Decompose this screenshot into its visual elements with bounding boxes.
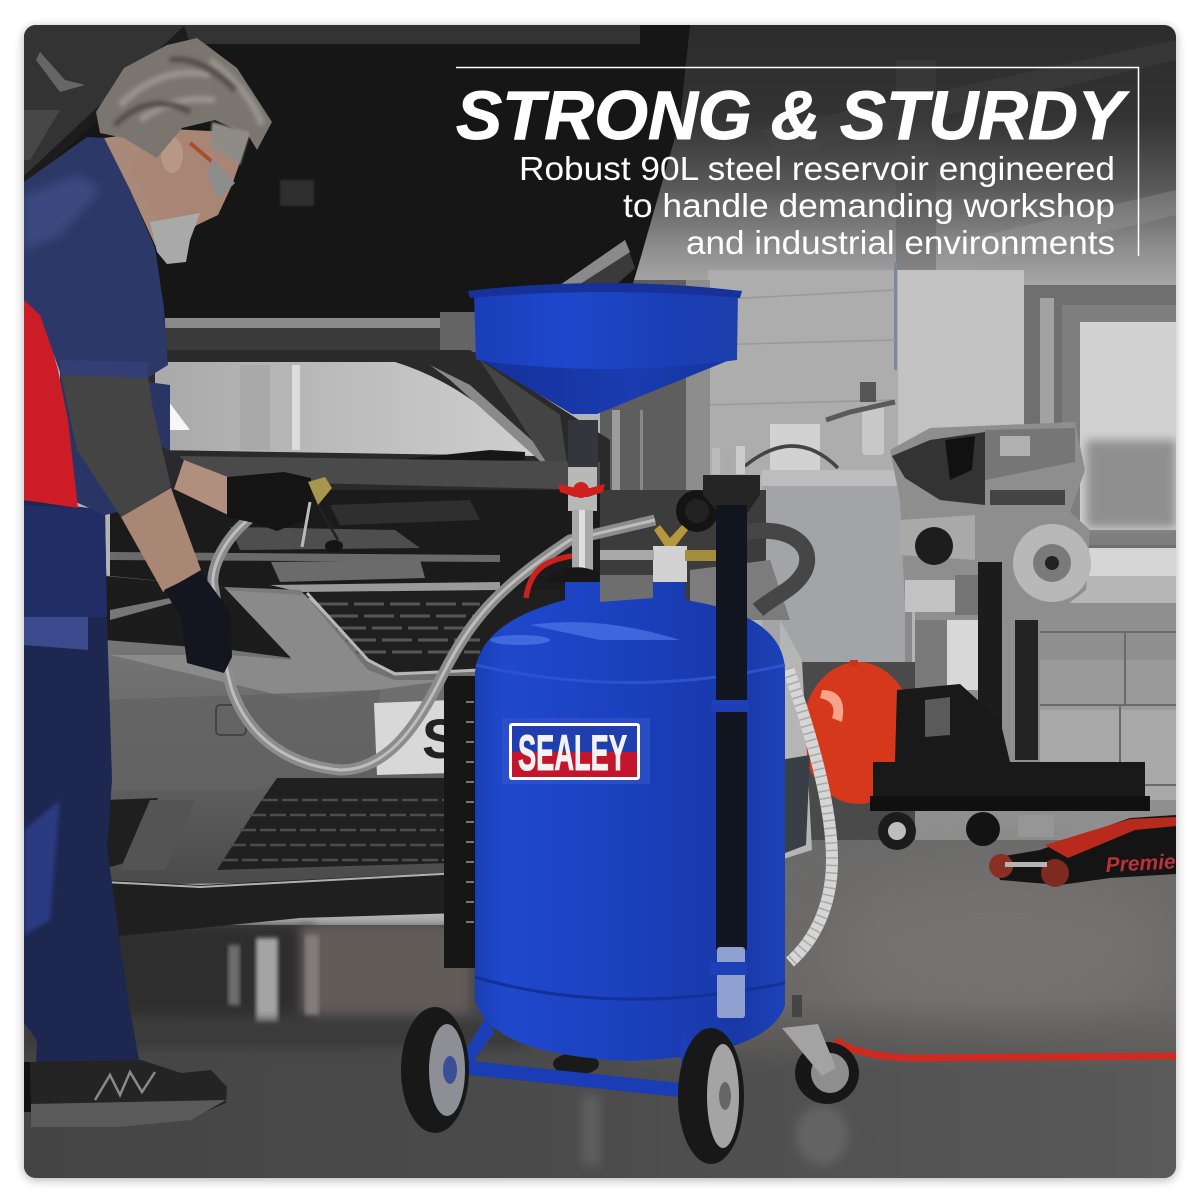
navy shirt <box>24 137 168 378</box>
shoe laces <box>95 1072 155 1100</box>
hair dark streaks <box>115 59 235 125</box>
car windscreen <box>155 362 535 456</box>
far forearm <box>174 460 228 515</box>
bumper slat <box>120 800 195 870</box>
bonnet front lip <box>165 240 635 355</box>
wall cabinet <box>762 470 912 662</box>
right wheel <box>678 1028 744 1164</box>
trouser highlight <box>24 800 60 935</box>
shirt sheen <box>24 175 100 250</box>
windscreen reflection <box>160 365 300 450</box>
column behind funnel <box>600 280 710 510</box>
gauge <box>676 490 718 532</box>
floor reflection right <box>862 886 1140 1006</box>
red hose to neck <box>526 556 572 598</box>
funnel bowl <box>468 283 742 414</box>
grey hair <box>96 38 272 158</box>
bumper lip <box>100 872 460 938</box>
car corner right of tank <box>780 620 812 860</box>
reflection streaks <box>24 935 848 1165</box>
hose highlight <box>213 513 655 770</box>
hose loop behind tube <box>745 531 807 610</box>
trolley jack <box>989 815 1186 887</box>
skirting behind compressor <box>802 662 915 840</box>
black neck cap <box>546 567 598 582</box>
upper glove <box>227 472 311 531</box>
headlight <box>105 576 291 658</box>
dome highlights <box>490 622 680 645</box>
windscreen wiper <box>404 450 525 461</box>
ceiling beams <box>896 40 1176 270</box>
car front body <box>100 575 480 885</box>
body line 2: to handle demanding workshop <box>623 187 1115 224</box>
blue tank body <box>475 582 785 1061</box>
brand logo <box>502 718 650 784</box>
oil drainer <box>401 283 859 1164</box>
red air compressor <box>806 660 902 804</box>
dark under car <box>119 918 318 1020</box>
bonnet detail <box>24 25 640 206</box>
engine bay <box>110 490 600 610</box>
sleeve hem <box>60 360 148 378</box>
face <box>130 128 250 245</box>
left wheel <box>401 1007 469 1133</box>
engine stand and tray <box>870 562 1150 850</box>
number plate: S <box>422 707 459 770</box>
car upper body dark surround <box>148 350 610 490</box>
red tabard side <box>24 290 78 508</box>
floor right <box>600 840 1176 1180</box>
far shoe <box>24 1062 38 1112</box>
body text <box>519 150 1115 261</box>
front grille <box>307 590 560 674</box>
hidden rear wheel <box>553 1053 599 1075</box>
safety glasses <box>190 143 235 199</box>
fog light surround <box>106 798 158 868</box>
body line 3: and industrial environments <box>686 224 1115 261</box>
cowl strip <box>180 456 600 490</box>
red air hose on floor <box>835 1040 1176 1058</box>
axle and frame <box>458 1015 690 1090</box>
trousers <box>24 500 139 1064</box>
brass and silver fittings <box>600 525 717 582</box>
caster bracket <box>782 995 859 1104</box>
concrete glow <box>300 925 470 1015</box>
neck <box>104 128 180 250</box>
window <box>1024 285 1176 553</box>
torso rear navy <box>60 370 170 515</box>
body line 1: Robust 90L steel reservoir engineered <box>519 150 1115 187</box>
beard <box>150 213 200 264</box>
trolley jack: Premier <box>1105 850 1186 877</box>
funnel socket and valve <box>558 420 605 570</box>
bumper sheen <box>110 590 434 706</box>
shoe sole <box>31 1100 226 1127</box>
spray nozzle <box>302 477 343 552</box>
mechanic <box>24 38 343 1127</box>
black standpipe <box>703 446 760 1018</box>
ear <box>161 137 183 173</box>
bonnet underside <box>24 25 690 385</box>
pillar and hinge <box>430 360 568 470</box>
wall section left of window <box>708 262 1024 446</box>
window sill <box>1088 548 1176 576</box>
tank side scale <box>444 676 478 968</box>
lower glove <box>164 572 232 673</box>
trouser light band <box>24 617 88 650</box>
far sleeve <box>150 443 184 486</box>
trouser pocket panel <box>24 505 107 617</box>
hose behind arm <box>213 513 655 770</box>
engine on stand <box>890 422 1091 622</box>
upper wall and ceiling shadow <box>600 25 1176 290</box>
temple grey <box>210 122 250 165</box>
engine parts behind tank <box>596 490 790 620</box>
near forearm <box>121 488 201 592</box>
heading frame lines <box>456 68 1138 256</box>
fuel flap outline <box>216 705 246 735</box>
floor left <box>24 925 624 1180</box>
tank top seam <box>476 665 785 682</box>
lower grille <box>217 778 450 870</box>
block wall <box>915 603 1176 843</box>
grey sleeve <box>61 375 171 517</box>
floor foreground band <box>24 1018 1176 1178</box>
hair highlights <box>120 60 262 125</box>
brand logo: SEALEY <box>518 725 627 781</box>
tank bottom seam <box>475 977 785 999</box>
heading: STRONG & STURDY <box>456 77 1130 154</box>
number plate <box>374 700 444 775</box>
clear return hose <box>788 668 832 962</box>
base wall <box>1165 25 1176 36</box>
clear drain hose <box>213 513 655 770</box>
shoe upper <box>30 1060 227 1120</box>
wall air regulator <box>745 382 895 470</box>
